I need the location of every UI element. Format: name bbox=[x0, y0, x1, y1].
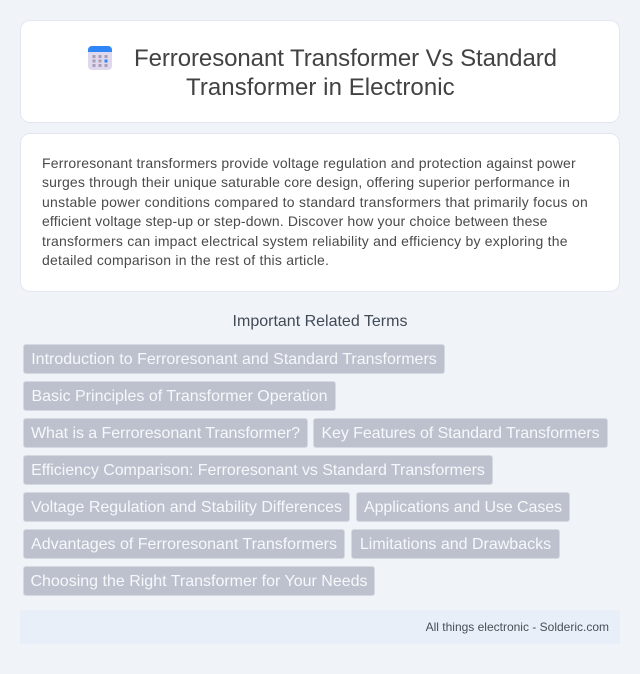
text block: introduction: Ferroresonant transformers provide voltage regulation and protection against power bbox=[42, 155, 576, 171]
tag: Introduction to Ferroresonant and Standard Transformers bbox=[31, 351, 437, 368]
panel: title card bbox=[20, 20, 620, 123]
text block: introduction: unstable power conditions compared to standard transformers that primarily focus on bbox=[42, 194, 588, 210]
tag bbox=[23, 529, 345, 559]
tag: Voltage Regulation and Stability Differences bbox=[31, 499, 342, 516]
tag: Key Features of Standard Transformers bbox=[321, 425, 600, 442]
tag bbox=[23, 418, 308, 448]
text block: introduction: transformers can impact electrical system reliability and efficiency by exploring the bbox=[42, 233, 568, 249]
tag bbox=[351, 529, 560, 559]
tag bbox=[23, 381, 336, 411]
footer text: All things electronic - Solderic.com bbox=[426, 620, 609, 634]
text block: introduction bbox=[42, 155, 588, 268]
tag bbox=[23, 455, 493, 485]
title bbox=[134, 45, 557, 101]
tag: Applications and Use Cases bbox=[364, 499, 562, 516]
panel: related term tags bbox=[23, 344, 608, 596]
tag bbox=[313, 418, 608, 448]
tag: What is a Ferroresonant Transformer? bbox=[31, 425, 300, 442]
title: Transformer in Electronic bbox=[186, 74, 455, 101]
heading: important related terms: Important Related Terms bbox=[233, 313, 407, 330]
tag: Choosing the Right Transformer for Your Needs bbox=[30, 573, 368, 590]
footer bbox=[20, 610, 620, 644]
tag bbox=[23, 344, 445, 374]
panel: introduction text bbox=[20, 133, 620, 292]
tag: Basic Principles of Transformer Operation bbox=[31, 388, 328, 405]
tag: Advantages of Ferroresonant Transformers bbox=[31, 536, 337, 553]
text block: introduction: efficient voltage step-up or step-down. Discover how your choice between these bbox=[42, 213, 548, 229]
tag: Limitations and Drawbacks bbox=[360, 536, 551, 553]
title: Ferroresonant Transformer Vs Standard bbox=[134, 45, 557, 72]
tag bbox=[356, 492, 570, 522]
tag: Efficiency Comparison: Ferroresonant vs Standard Transformers bbox=[31, 462, 485, 479]
tag bbox=[23, 492, 350, 522]
text block: introduction: surges through their unique saturable core design, offering superior performance in bbox=[42, 174, 570, 190]
icon: calendar bbox=[88, 46, 112, 70]
text block: introduction: detailed comparison in the rest of this article. bbox=[42, 252, 329, 268]
tag bbox=[23, 566, 375, 596]
